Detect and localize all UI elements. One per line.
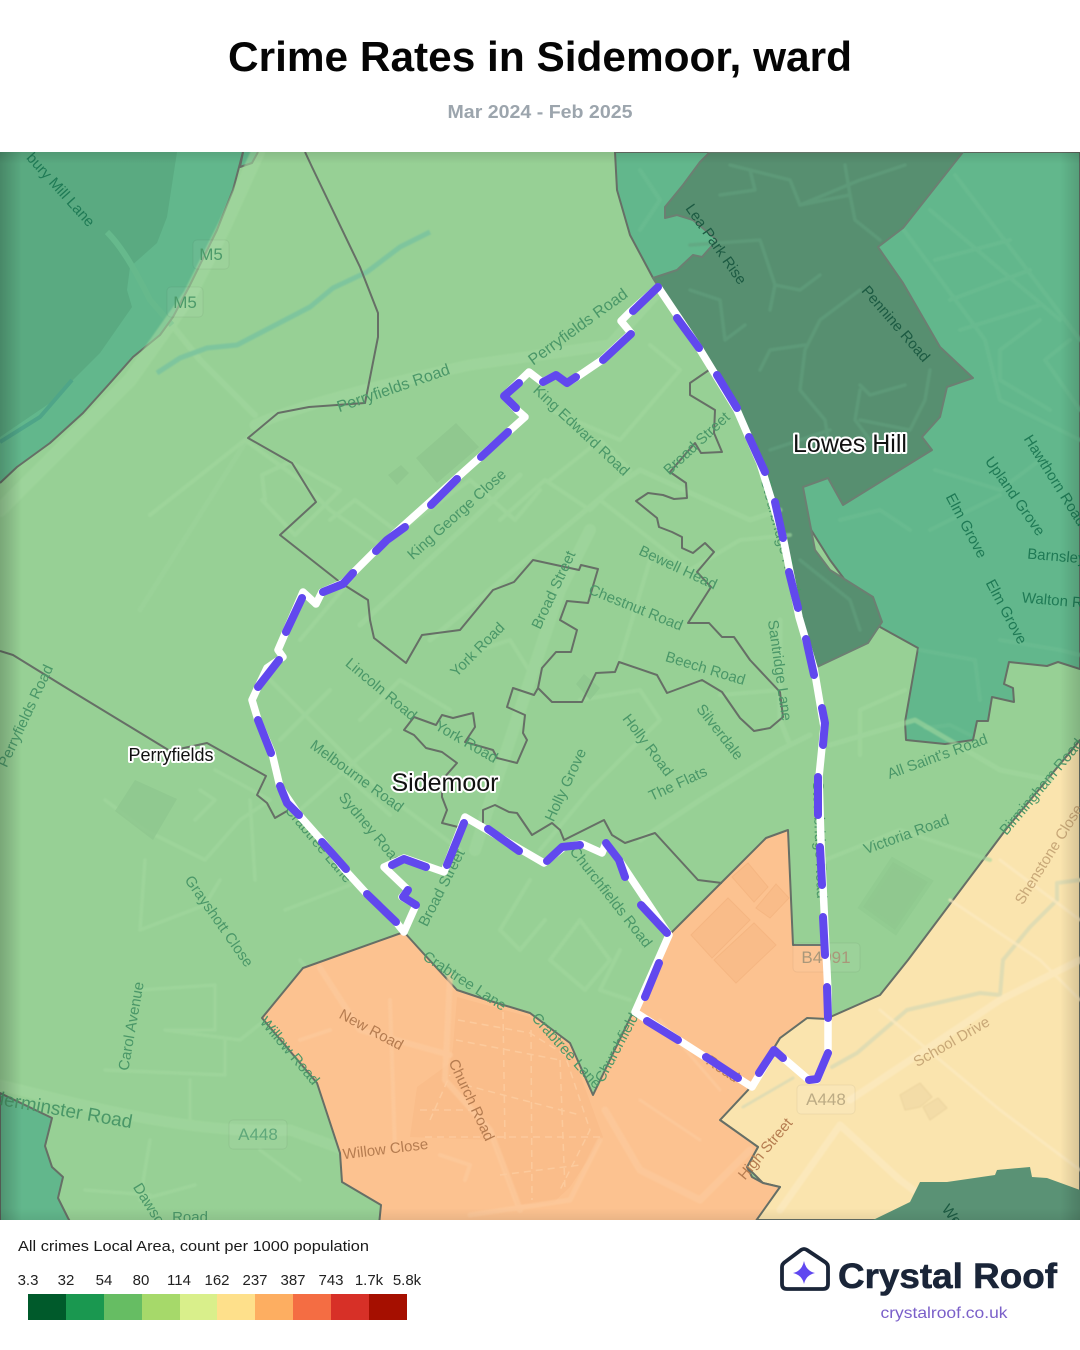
- road labels: Lea Park Rise: [682, 201, 750, 288]
- road labels: Elm Grove: [982, 577, 1030, 647]
- road labels: Perryfields Road: [526, 286, 631, 369]
- website: crystalroof.co.uk: [880, 1305, 1009, 1322]
- road labels: King Edward Road: [530, 382, 633, 480]
- road labels: Elm Grove: [942, 491, 990, 561]
- road labels: Crabtree Lane: [281, 802, 356, 886]
- road labels: Road: [703, 1052, 742, 1086]
- region: south-east dark green area: [873, 1167, 1080, 1220]
- road labels: Dawson: [129, 1180, 172, 1235]
- road labels: King George Close: [404, 466, 510, 563]
- road labels: Willow Close: [342, 1136, 429, 1163]
- road labels: Sydney Road: [335, 789, 406, 869]
- road shields: M5: [173, 293, 197, 312]
- road labels: Churchfields Road: [566, 843, 655, 951]
- road labels: Broad Street: [660, 408, 734, 479]
- legend scale values: 387: [280, 1272, 306, 1289]
- road shields: M5: [199, 245, 223, 264]
- road labels: All Saint's Road: [885, 731, 990, 783]
- road labels: Crabtree Lane: [528, 1010, 605, 1092]
- legend scale values: 237: [242, 1272, 268, 1289]
- road labels: Bewell Head: [636, 542, 720, 593]
- legend scale values: 162: [204, 1272, 230, 1289]
- road labels: Churchfield: [592, 1010, 642, 1085]
- road labels: Church Road: [445, 1056, 497, 1144]
- road labels: The Flats: [646, 763, 710, 805]
- road labels: Perryfields Road: [335, 361, 452, 416]
- road labels: Holly Grove: [542, 746, 590, 824]
- road labels: Willow Road: [256, 1014, 323, 1088]
- legend scale values: 3.3: [18, 1272, 38, 1289]
- legend scale values: 743: [318, 1272, 344, 1289]
- legend scale values: 114: [167, 1272, 191, 1289]
- legend title: All crimes Local Area, count per 1000 population: [18, 1239, 369, 1255]
- road shields: [167, 240, 860, 1149]
- roads: eastern area: [918, 334, 1080, 658]
- road labels: Crabtree Lane: [420, 948, 509, 1014]
- roads: Lowes Hill: [690, 165, 930, 630]
- place label: Perryfields: Perryfields: [128, 745, 214, 765]
- legend scale values: 80: [133, 1272, 149, 1289]
- region: Sidemoor-adjacent orange areas: [262, 830, 827, 1225]
- roads: light green ward areas: [140, 152, 1053, 862]
- legend scale values: 5.8k: [393, 1272, 422, 1289]
- road labels: Holly Road: [619, 711, 676, 780]
- road labels: Broad Street: [415, 846, 469, 929]
- legend scale values: 54: [96, 1272, 112, 1289]
- region: town centre pale yellow area: [720, 740, 1080, 1220]
- road labels: Melbourne Road: [307, 737, 407, 816]
- road labels: Carol Avenue: [115, 981, 148, 1072]
- road labels: Lincoln Road: [342, 655, 420, 724]
- road labels: Beech Road: [663, 648, 747, 689]
- place label: Lowes Hill: Lowes Hill: [793, 430, 907, 458]
- road labels: Grayshott Close: [181, 872, 256, 970]
- region: Lowes Hill dark green area: [653, 152, 973, 668]
- road labels: High Street: [735, 1114, 797, 1183]
- subtitle: date range: Mar 2024 - Feb 2025: [448, 102, 632, 122]
- road labels: York Road: [447, 619, 508, 680]
- legend scale values: [18, 1272, 422, 1289]
- ward boundary: Sidemoor dashed outline: [252, 287, 828, 1087]
- road labels: Pennine Road: [858, 283, 933, 366]
- green space: parks and pitches: [116, 695, 922, 924]
- region: eastern mid green area: [615, 152, 1080, 744]
- legend scale values: 1.7k: [355, 1272, 384, 1289]
- icon: house with star: [782, 1249, 828, 1289]
- legend: [18, 1239, 422, 1320]
- road labels: Chestnut Road: [586, 581, 685, 634]
- road labels: Broad Street: [528, 548, 580, 632]
- road labels: bury Mill Lane: [23, 150, 98, 230]
- wordmark: Crystal Roof: [838, 1257, 1057, 1296]
- details: orange area streets, church and buildings: [300, 863, 789, 1215]
- road shields: A448: [806, 1090, 846, 1109]
- internal ward boundaries: [0, 152, 783, 883]
- stream: Perryfields brook: [157, 232, 430, 373]
- road labels: School Drive: [911, 1013, 993, 1071]
- place label: Sidemoor: Sidemoor: [392, 769, 498, 797]
- legend colour bar: [28, 1294, 407, 1320]
- road labels: Stourbridge Road: [809, 781, 830, 899]
- roads and stream: town centre: [743, 860, 1080, 1210]
- map edge shading: [0, 152, 1080, 1220]
- road shields: A448: [238, 1125, 278, 1144]
- road shields: B4091: [801, 948, 851, 967]
- region: base light green areas: [0, 152, 1080, 1220]
- logo: Crystal Roof: [782, 1249, 1057, 1322]
- road labels: We: [938, 1201, 965, 1229]
- road labels: Victoria Road: [861, 811, 952, 858]
- road labels: New Road: [336, 1006, 406, 1054]
- road labels: Silverdale: [693, 701, 747, 763]
- road labels: Upland Grove: [981, 454, 1048, 539]
- region: south-west mid green area: [0, 1093, 72, 1225]
- legend scale values: 32: [58, 1272, 74, 1289]
- road labels: Santridge Lane: [764, 619, 795, 722]
- road labels: York Road: [432, 717, 501, 767]
- title: Crime Rates in Sidemoor, ward: [228, 33, 852, 80]
- road labels: Stourbridge Road: [757, 477, 804, 595]
- road labels: Road: [172, 1209, 208, 1226]
- region: north-west mid green area: [0, 152, 258, 483]
